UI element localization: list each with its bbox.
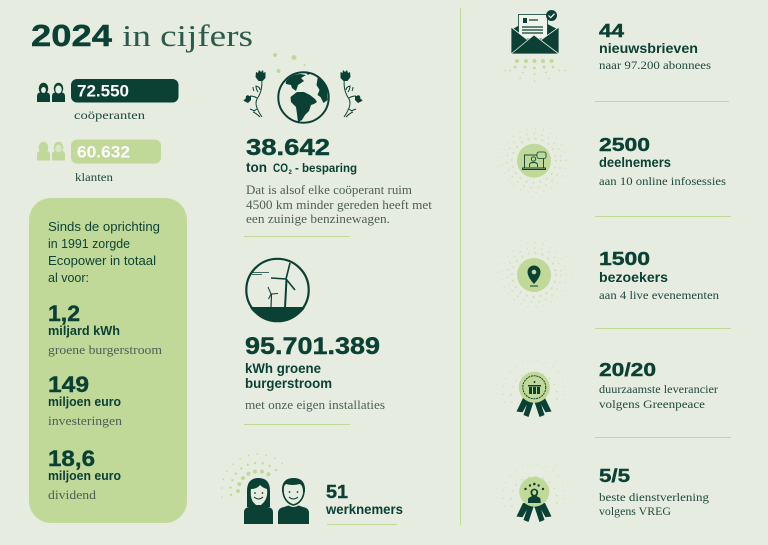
stat: bezoekers: aan 4 live evenementen (599, 290, 719, 302)
stat: bezoekers: 1500 (599, 248, 650, 269)
man (278, 478, 309, 524)
stat: deelnemers: aan 10 online infosessies (599, 176, 727, 188)
stat: CO2 saving: CO (273, 163, 288, 175)
icon: two clients light (37, 142, 65, 160)
stat: deelnemers: deelnemers (599, 155, 671, 170)
intro text: Ecopower in totaal (48, 254, 156, 268)
stat: 149 miljoen euro: investeringen (48, 414, 123, 428)
stat: VREG: volgens VREG (599, 506, 671, 518)
stat: nieuwsbrieven (599, 20, 712, 72)
woman (244, 478, 273, 524)
icon: online session (497, 124, 571, 198)
stat: VREG: 5/5 (599, 465, 630, 486)
description (246, 183, 433, 226)
stat: 1,2 miljard kWh (48, 301, 162, 357)
intro text: Sinds de oprichting (48, 220, 160, 234)
stat: 149 miljoen euro: miljoen euro (48, 395, 121, 409)
stat: werknemers: werknemers (325, 502, 403, 517)
title: in cijfers (122, 18, 253, 53)
stat: Greenpeace: volgens Greenpeace (599, 399, 705, 411)
intro text: in 1991 zorgde (48, 237, 130, 251)
stat: green electricity: burgerstroom (245, 376, 332, 391)
stat: nieuwsbrieven: naar 97.200 abonnees (599, 60, 712, 72)
stat: nieuwsbrieven: nieuwsbrieven (599, 41, 698, 56)
stat: 149 miljoen euro: 149 (48, 372, 89, 397)
description: Dat is alsof elke coöperant ruim (246, 183, 412, 197)
stat: 1,2 miljard kWh: groene burgerstroom (48, 343, 162, 357)
title: 2024 (31, 18, 113, 53)
icon: wind turbines (246, 259, 309, 321)
stat: CO2 saving: 38.642 (246, 134, 330, 160)
stat: CO2 saving: 2 (288, 170, 292, 176)
stat: deelnemers: 2500 (599, 134, 650, 155)
stat: green electricity (245, 333, 385, 412)
description: een zuinige benzinewagen. (246, 212, 390, 226)
icon: medal VREG (497, 457, 571, 522)
icon: employees (221, 454, 309, 524)
icon: medal Greenpeace (497, 353, 571, 417)
icon: newsletter envelope (504, 10, 566, 82)
stat: 1,2 miljard kWh: miljard kWh (48, 324, 120, 338)
stat: Greenpeace: duurzaamste leverancier (599, 384, 718, 396)
stat: CO2 saving: ton (246, 160, 267, 175)
stat: coöperanten: 72.550 (77, 82, 129, 100)
stat: bezoekers (599, 248, 719, 302)
stat: 18,6 miljoen euro (48, 446, 121, 502)
stat: 1,2 miljard kWh: 1,2 (48, 301, 80, 326)
icon: location pin (497, 238, 571, 312)
title (31, 18, 253, 53)
stat: bezoekers: bezoekers (599, 270, 668, 285)
stat: klanten: klanten (75, 170, 113, 184)
stat: 18,6 miljoen euro: dividend (48, 488, 97, 502)
stat: green electricity: kWh groene (245, 361, 321, 376)
stat: deelnemers (599, 134, 727, 188)
description: 4500 km minder gereden heeft met (246, 198, 433, 212)
dots below envelope (504, 59, 566, 82)
stat: klanten (37, 140, 161, 184)
stat: 18,6 miljoen euro: 18,6 (48, 446, 95, 471)
stat: nieuwsbrieven: 44 (599, 20, 625, 41)
stat: CO2 saving: - besparing (295, 161, 357, 175)
stat: coöperanten (37, 79, 178, 122)
flowers left (250, 75, 262, 117)
stat: coöperanten: coöperanten (74, 108, 145, 122)
stat: klanten: 60.632 (77, 142, 130, 162)
stat: 149 miljoen euro (48, 372, 123, 428)
stat: werknemers (325, 481, 403, 517)
stat: green electricity: 95.701.389 (245, 333, 380, 360)
stat: Greenpeace (599, 359, 718, 411)
intro text: al voor: (48, 271, 89, 285)
stat: 18,6 miljoen euro: miljoen euro (48, 469, 121, 483)
panel: sinds de oprichting (29, 198, 187, 523)
stat: CO2 saving (246, 134, 433, 226)
icon: two members dark (37, 83, 65, 102)
stat: Greenpeace: 20/20 (599, 359, 656, 380)
stat: VREG (599, 465, 709, 518)
flowers right (344, 75, 356, 117)
stat: werknemers: 51 (326, 481, 348, 502)
stat: green electricity: met onze eigen installaties (245, 398, 385, 412)
stat: VREG: beste dienstverlening (599, 492, 709, 504)
intro text (48, 220, 160, 285)
icon: globe with flowers (244, 53, 362, 123)
